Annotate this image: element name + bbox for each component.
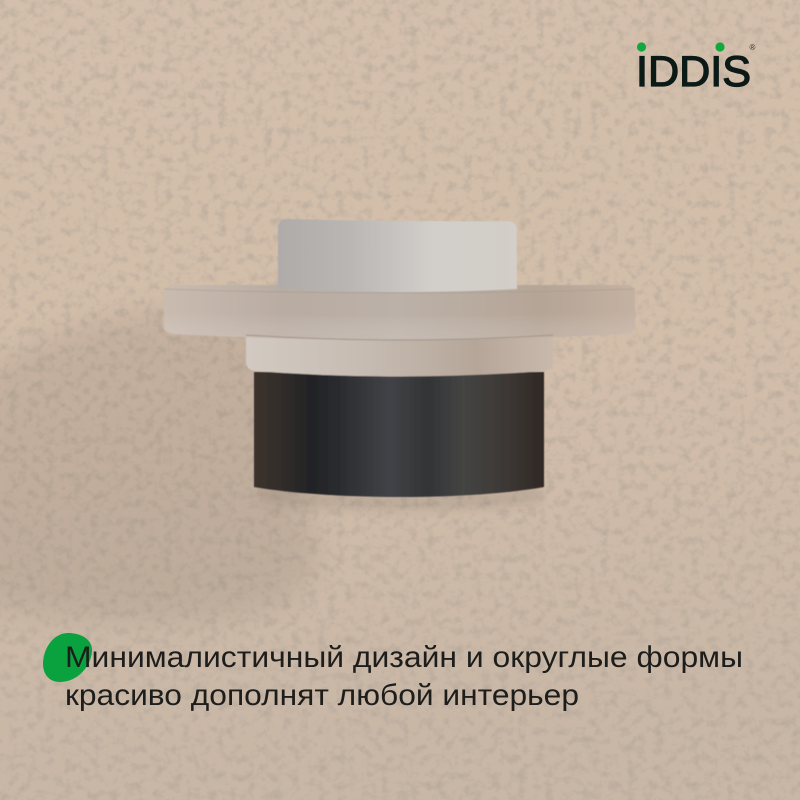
plate bottom line [246, 335, 553, 340]
product cast shadow on wall [0, 310, 317, 623]
plate front rim line [164, 289, 635, 293]
soft shadow under product [262, 485, 540, 510]
registered mark: ® [750, 43, 756, 52]
black metal base [254, 372, 544, 497]
logo: IDDIS [636, 42, 756, 96]
caption text [65, 641, 743, 712]
caption line 2: красиво дополнят любой интерьер [65, 679, 579, 712]
logo wordmark: IDDIS [636, 48, 751, 96]
green accent blob [43, 633, 92, 682]
frosted glass plate [164, 285, 635, 340]
logo green dot: first i [637, 42, 646, 52]
frosted glass cup [278, 219, 517, 292]
logo green dot: second i [715, 42, 725, 52]
caption line 1: Минималистичный дизайн и округлые формы [65, 641, 743, 674]
product: wall-mounted holder [164, 219, 635, 510]
frosted collar [246, 335, 553, 376]
plate highlight [164, 312, 635, 340]
